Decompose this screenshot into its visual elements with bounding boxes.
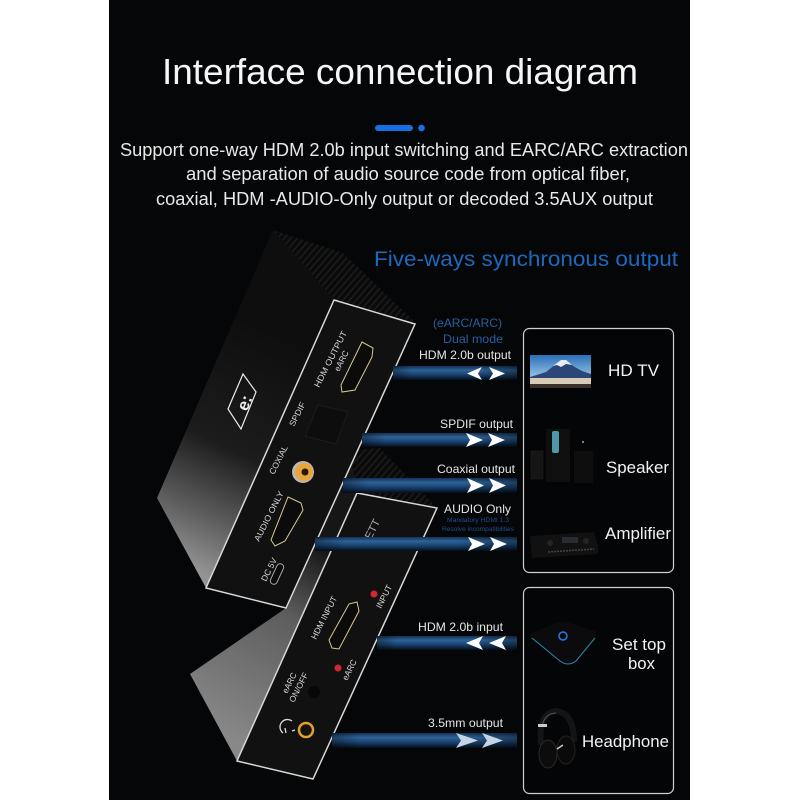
lower unit port labels: ON/OFF (287, 671, 310, 704)
cable: HDMI 2.0b input (377, 636, 517, 650)
panel: output devices (524, 328, 674, 572)
cable labels: AUDIO Only (444, 502, 511, 516)
icon: speaker set (531, 429, 593, 483)
upper unit front panel (206, 300, 415, 608)
cable labels: HDM 2.0b input (418, 620, 504, 634)
cable labels: HDM 2.0b output (419, 348, 512, 362)
description text: Support one-way HDM 2.0b input switching and EARC/ARC extraction (120, 140, 688, 160)
lower unit LED indicators (370, 590, 378, 598)
HDMI output port (341, 342, 373, 392)
eARC mode note: Dual mode (443, 332, 503, 346)
lower unit port labels: eARC (280, 671, 299, 695)
lower unit port labels (280, 517, 394, 704)
upper unit logo: e: (233, 392, 256, 413)
description text: coaxial, HDM -AUDIO-Only output or decoded 3.5AUX output (156, 189, 653, 209)
upper unit port labels: HDM OUTPUT (312, 329, 349, 389)
headphone jack (299, 723, 313, 737)
output arrows (456, 733, 503, 748)
lower unit HDMI input port (329, 602, 359, 649)
upper unit port labels: SPDIF (287, 400, 308, 428)
lower unit port labels: ETT (363, 517, 383, 541)
headphone label: Headphone (582, 732, 669, 751)
lower unit port labels: HDM INPUT (309, 594, 339, 641)
output arrows (468, 537, 507, 551)
upper unit port labels (252, 329, 351, 583)
icon: amplifier (530, 532, 598, 558)
icon: headphones (538, 711, 575, 768)
cable labels: 3.5mm output (428, 716, 504, 730)
coaxial RCA port (292, 461, 314, 483)
upper unit logo (228, 374, 256, 429)
HDMI 1.3 note (442, 518, 514, 533)
icon: set top box (530, 622, 596, 665)
speaker label: Speaker (606, 458, 669, 477)
device: lower converter unit (190, 420, 437, 779)
set top box label: box (628, 654, 655, 673)
cable: audio only (315, 537, 517, 551)
cable labels: Coaxial output (437, 462, 516, 476)
amplifier label: Amplifier (605, 524, 671, 543)
set top box label: Set top (612, 635, 666, 654)
HDMI 1.3 note: Mandatory HDMI 1.3 (447, 518, 510, 524)
title: Interface connection diagram (162, 51, 638, 92)
cable: coaxial output (343, 478, 517, 493)
HD TV label: HD TV (608, 361, 660, 380)
cable labels: SPDIF output (440, 417, 514, 431)
output arrows (466, 433, 505, 447)
output arrows (467, 478, 506, 493)
upper unit top surface (157, 230, 334, 588)
upper unit port labels: eARC (332, 349, 351, 373)
AUDIO ONLY HDMI port (271, 497, 303, 546)
upper unit port labels: AUDIO ONLY (252, 489, 286, 543)
dark background panel (109, 0, 690, 800)
upper unit heat-sink ribs (273, 230, 415, 322)
cable labels (418, 316, 516, 730)
device: upper converter unit (157, 230, 415, 608)
lower unit heat-sink ribs (350, 448, 437, 508)
eARC mode note (433, 316, 503, 346)
eARC button (308, 686, 320, 698)
USB-C power port (269, 563, 285, 585)
description text (120, 140, 688, 209)
upper unit port labels: COXIAL (267, 444, 290, 476)
headphone symbol (280, 720, 295, 733)
bidirectional arrows (467, 367, 505, 380)
HDMI 1.3 note: Resolve incompatibilities (442, 527, 514, 533)
set top box label (612, 635, 666, 673)
panel: source and headphone (524, 588, 674, 794)
upper unit port labels: DC 5V (259, 556, 279, 583)
lower unit port labels: INPUT (374, 583, 394, 610)
SPDIF optical port (305, 405, 348, 444)
icon: HD TV (530, 355, 591, 388)
input arrows (466, 636, 506, 650)
cable: 3.5mm output (332, 733, 517, 748)
description text: and separation of audio source code from optical fiber, (186, 164, 630, 184)
cable: HDMI 2.0b output (393, 366, 517, 380)
lower unit top surface (190, 420, 357, 761)
eARC mode note: (eARC/ARC) (433, 316, 502, 330)
accent bar and dot (375, 125, 425, 131)
cable: SPDIF output (362, 433, 517, 447)
lower unit front panel (237, 493, 437, 779)
subheading: five-way output: Five-ways synchronous output (374, 247, 678, 271)
lower unit port labels: eARC (340, 658, 359, 682)
